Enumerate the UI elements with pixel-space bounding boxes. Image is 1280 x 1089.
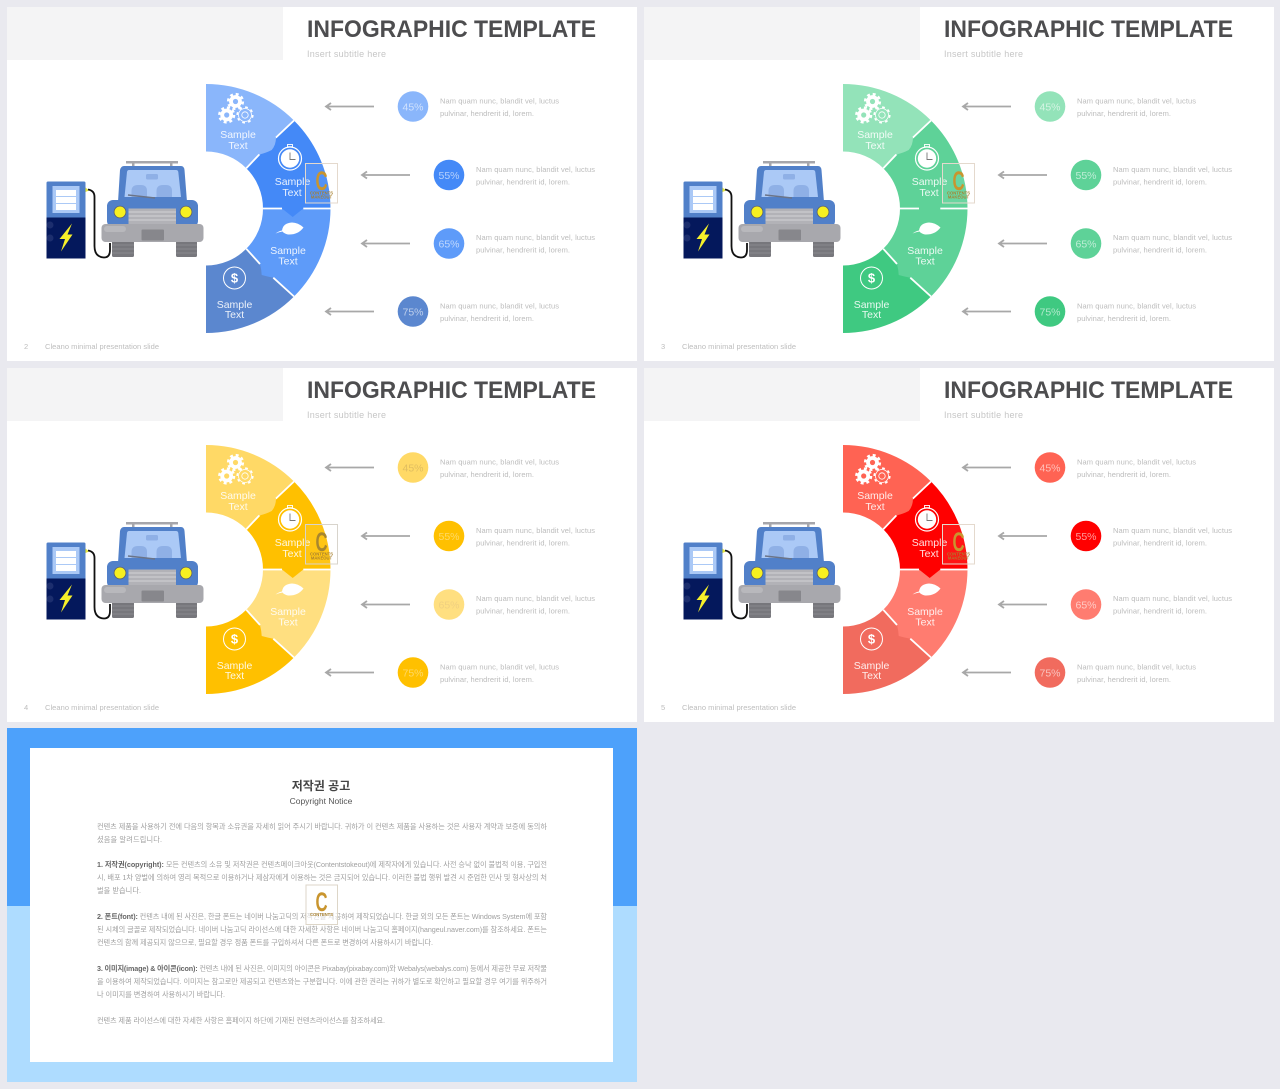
icon: gears — [856, 94, 890, 123]
item 55% — [1071, 160, 1232, 190]
item 45% — [398, 91, 559, 122]
illustration: fuel pump and car — [684, 522, 840, 620]
item 45%: 45% — [1039, 102, 1061, 114]
semicircle diagram: Sample — [220, 490, 256, 502]
subtitle: Insert subtitle here — [944, 410, 1023, 420]
item 55%: Nam quam nunc, blandit vel, luctus — [476, 165, 595, 174]
item 65%: pulvinar, hendrerit id, lorem. — [1113, 606, 1207, 616]
watermark logo: C — [315, 887, 328, 917]
semicircle diagram: Text — [862, 670, 881, 682]
semicircle diagram: Text — [228, 140, 248, 152]
item 55%: 55% — [1075, 531, 1097, 543]
semicircle diagram: Text — [282, 187, 302, 199]
item 75% — [398, 296, 559, 327]
semicircle diagram: Text — [278, 256, 298, 268]
item 55%: pulvinar, hendrerit id, lorem. — [1113, 178, 1207, 186]
watermark logo — [942, 524, 974, 564]
item 65%: 65% — [438, 238, 460, 250]
icon: leaf — [276, 584, 304, 596]
item 55% — [1071, 521, 1232, 551]
icon: gears — [220, 94, 253, 123]
item 55% — [434, 521, 595, 551]
icon: gears — [856, 455, 890, 484]
semicircle diagram: Sample — [907, 245, 943, 257]
footer: 4 — [24, 703, 28, 712]
clause 3: 3. 이미지(image) & 아이콘(icon): 컨텐츠 내에 된 사진은, 이미지의 아이콘은 Pixabay(pixabay.com)와 Webalys(webalys.com) 등에서 제공한 무료 저작물 — [97, 964, 547, 973]
semicircle diagram: Text — [278, 616, 298, 628]
subtitle: Insert subtitle here — [307, 410, 386, 420]
semicircle diagram: Sample — [217, 660, 252, 672]
item 75%: Nam quam nunc, blandit vel, luctus — [1077, 302, 1196, 310]
semicircle diagram: Text — [225, 309, 244, 321]
item 45%: Nam quam nunc, blandit vel, luctus — [1077, 96, 1196, 106]
item 45%: 45% — [1039, 462, 1061, 474]
semicircle diagram: Text — [919, 548, 939, 560]
watermark logo: C — [315, 527, 328, 557]
intro text — [97, 822, 547, 844]
footer: 2 — [24, 342, 28, 351]
item 65%: pulvinar, hendrerit id, lorem. — [476, 606, 570, 616]
copyright heading: 저작권 공고 — [292, 778, 350, 793]
item 65%: Nam quam nunc, blandit vel, luctus — [1113, 594, 1232, 603]
item 65% — [1071, 228, 1232, 259]
clause 1: 시, 배포 1차 양벌에 의하여 영리 목적으로 이용하거나 제삼자에게 이용하는 것은 금지되어 있습니다. 이러한 불법 행위 발견 시 준엄한 민사 및 형사상의 처 — [97, 873, 547, 882]
watermark logo — [942, 164, 974, 203]
item 55%: pulvinar, hendrerit id, lorem. — [476, 538, 570, 548]
item 75%: Nam quam nunc, blandit vel, luctus — [440, 302, 559, 310]
illustration: fuel pump and car — [46, 522, 204, 620]
semicircle diagram — [843, 445, 968, 694]
item 55%: Nam quam nunc, blandit vel, luctus — [1113, 526, 1232, 535]
subtitle: Insert subtitle here — [944, 49, 1023, 59]
semicircle diagram: Sample — [275, 176, 310, 188]
item 55%: 55% — [438, 531, 460, 543]
footer: Cleano minimal presentation slide — [682, 342, 796, 351]
semicircle diagram: Sample — [857, 490, 893, 502]
watermark logo: C — [315, 166, 328, 196]
item 45%: 45% — [402, 462, 424, 474]
clause 3: 을 이용하여 제작되었습니다. 이미지는 참고로만 제공되고 컨텐츠와는 구분합니다. 이에 관한 권리는 귀하가 별도로 확인하고 필요할 경우 여기를 위주하거 — [97, 977, 547, 986]
illustration: fuel pump and car — [684, 161, 840, 258]
watermark logo: MAKEOUT — [311, 194, 333, 200]
icon: dollar: $ — [868, 270, 876, 286]
item 65%: Nam quam nunc, blandit vel, luctus — [476, 233, 595, 242]
watermark logo: CONTENTS — [310, 190, 333, 196]
item 75%: 75% — [1039, 668, 1061, 680]
item 65%: Nam quam nunc, blandit vel, luctus — [476, 594, 595, 603]
title: INFOGRAPHIC TEMPLATE — [307, 16, 596, 43]
item 45%: Nam quam nunc, blandit vel, luctus — [440, 96, 559, 106]
icon: dollar: $ — [868, 632, 876, 646]
item 65%: Nam quam nunc, blandit vel, luctus — [1113, 233, 1232, 242]
clause 3: 나 이미지를 변경하여 사용하시기 바랍니다. — [97, 990, 225, 999]
item 75%: 75% — [402, 668, 424, 680]
item 65%: 65% — [1075, 600, 1097, 612]
semicircle diagram: Text — [865, 140, 885, 152]
icon: gears — [220, 455, 253, 484]
semicircle diagram: Sample — [907, 606, 943, 618]
semicircle diagram: Text — [915, 256, 935, 268]
icon: dollar: $ — [231, 270, 239, 286]
semicircle diagram: Text — [225, 670, 244, 682]
footer: Cleano minimal presentation slide — [682, 703, 796, 712]
clause 2: 2. 폰트(font): 컨텐츠 내에 된 사진은, 한글 폰트는 네이버 나눔고딕의 저작권을 제공하여 제작되었습니다. 한글 외의 모든 폰트는 Windows System에 포함 — [97, 912, 547, 921]
intro text: 셨음을 알려드립니다. — [97, 835, 162, 844]
item 45%: pulvinar, hendrerit id, lorem. — [440, 470, 534, 479]
item 75%: Nam quam nunc, blandit vel, luctus — [440, 662, 559, 672]
semicircle diagram: Sample — [912, 176, 947, 188]
watermark logo: C — [952, 166, 965, 196]
watermark logo: CONTENTS — [947, 190, 970, 196]
icon: leaf — [912, 222, 940, 235]
item 55%: pulvinar, hendrerit id, lorem. — [1113, 538, 1207, 548]
icon: stopwatch — [916, 506, 938, 531]
item 75%: 75% — [402, 306, 424, 318]
panel: green infographic slide — [644, 7, 1274, 361]
arrows — [963, 464, 1047, 676]
item 55%: Nam quam nunc, blandit vel, luctus — [476, 526, 595, 535]
semicircle diagram: Text — [862, 309, 881, 321]
item 65%: 65% — [438, 600, 460, 612]
arrows — [963, 103, 1047, 315]
footer: 5 — [661, 703, 665, 712]
semicircle diagram: Sample — [854, 660, 889, 672]
watermark logo: CONTENTS — [947, 552, 970, 556]
title: INFOGRAPHIC TEMPLATE — [944, 377, 1233, 404]
panel: blue infographic slide — [7, 7, 637, 361]
item 75%: 75% — [1039, 306, 1061, 318]
icon: leaf — [912, 584, 940, 596]
item 65%: 65% — [1075, 238, 1097, 250]
icon: dollar — [860, 628, 882, 650]
semicircle diagram: Text — [228, 501, 248, 513]
footer: Cleano minimal presentation slide — [45, 342, 159, 351]
subtitle: Insert subtitle here — [307, 49, 386, 59]
item 75%: pulvinar, hendrerit id, lorem. — [1077, 314, 1171, 323]
item 75%: pulvinar, hendrerit id, lorem. — [440, 675, 534, 684]
illustration: fuel pump and car — [46, 161, 204, 258]
semicircle diagram: Sample — [912, 537, 947, 549]
item 45% — [398, 452, 559, 483]
watermark logo: MAKEOUT — [311, 556, 333, 560]
panel: red infographic slide — [644, 368, 1274, 722]
footer: 3 — [661, 342, 665, 351]
icon: dollar: $ — [231, 632, 239, 646]
semicircle diagram: Sample — [270, 245, 306, 257]
semicircle diagram: Sample — [854, 299, 889, 311]
watermark logo: MAKEOUT — [948, 194, 970, 200]
title: INFOGRAPHIC TEMPLATE — [944, 16, 1233, 43]
watermark logo — [306, 885, 338, 924]
clause 1: 1. 저작권(copyright): 모든 컨텐츠의 소유 및 저작권은 컨텐츠메이크아웃(Contentstokeout)에 제작자에게 있습니다. 사전 승낙 없이 불법적 이용, 구입전 — [97, 860, 547, 869]
item 45%: Nam quam nunc, blandit vel, luctus — [1077, 458, 1196, 466]
watermark logo: CONTENTS — [310, 912, 333, 917]
semicircle diagram: Sample — [857, 129, 893, 141]
footer: Cleano minimal presentation slide — [45, 703, 159, 712]
item 75% — [1035, 296, 1196, 327]
icon: dollar — [860, 267, 882, 289]
intro text: 컨텐츠 제품을 사용하기 전에 다음의 항목과 소유권을 자세히 읽어 주시기 바랍니다. 귀하가 이 컨텐츠 제품을 사용하는 것은 사용자 계약과 보증에 동의하 — [97, 822, 547, 831]
item 55% — [434, 160, 595, 190]
item 45%: pulvinar, hendrerit id, lorem. — [1077, 470, 1171, 479]
copyright heading: Copyright Notice — [290, 796, 353, 806]
icon: stopwatch — [278, 506, 302, 531]
item 55%: pulvinar, hendrerit id, lorem. — [476, 178, 570, 186]
clause 1 — [97, 860, 547, 895]
item 65% — [1071, 589, 1232, 620]
icon: stopwatch — [916, 144, 938, 170]
item 55%: Nam quam nunc, blandit vel, luctus — [1113, 165, 1232, 174]
item 75%: pulvinar, hendrerit id, lorem. — [1077, 675, 1171, 684]
watermark logo: CONTENTS — [310, 552, 333, 556]
item 75%: pulvinar, hendrerit id, lorem. — [440, 314, 534, 323]
copyright heading — [290, 778, 353, 806]
clause 2: 된 시체의 글꼴로 제작되었습니다. 네이버 나눔고딕 라이선스에 대한 자세한 사항은 네이버 나눔고딕 홈페이지(hangeul.naver.com)를 참조하세요. 폰트는 — [97, 925, 547, 934]
watermark logo: MAKEOUT — [948, 556, 970, 560]
title: INFOGRAPHIC TEMPLATE — [307, 377, 596, 404]
item 65%: pulvinar, hendrerit id, lorem. — [476, 246, 570, 254]
arrows — [326, 103, 410, 315]
semicircle diagram: Text — [919, 187, 939, 199]
semicircle diagram — [206, 445, 330, 694]
item 45% — [1035, 452, 1196, 483]
arrows — [326, 464, 410, 676]
semicircle diagram: Sample — [270, 606, 306, 618]
clause 2: 컨텐츠의 함께 제공되지 않으므로, 필요할 경우 정품 폰트를 구입하셔서 다른 폰트로 변경하여 사용하시기 바랍니다. — [97, 938, 433, 947]
item 75% — [398, 657, 559, 688]
semicircle diagram: Text — [915, 616, 935, 628]
panel: copyright notice — [7, 728, 637, 1082]
semicircle diagram: Sample — [275, 537, 310, 549]
item 55%: 55% — [438, 170, 460, 182]
item 65% — [434, 228, 595, 259]
icon: dollar — [224, 267, 246, 289]
item 75%: Nam quam nunc, blandit vel, luctus — [1077, 662, 1196, 672]
semicircle diagram: Text — [865, 501, 885, 513]
item 45% — [1035, 91, 1196, 122]
item 75% — [1035, 657, 1196, 688]
semicircle diagram — [843, 84, 968, 333]
watermark logo: C — [952, 527, 965, 557]
item 45%: Nam quam nunc, blandit vel, luctus — [440, 458, 559, 466]
icon: leaf — [276, 222, 304, 235]
icon: stopwatch — [278, 144, 302, 170]
semicircle diagram: Text — [282, 548, 302, 560]
item 55%: 55% — [1075, 170, 1097, 182]
item 65%: pulvinar, hendrerit id, lorem. — [1113, 246, 1207, 254]
panel: yellow infographic slide — [7, 368, 637, 722]
icon: dollar — [224, 628, 246, 650]
closing text: 컨텐츠 제품 라이선스에 대한 자세한 사항은 홈페이지 하단에 기재된 컨텐츠라이선스를 참조하세요. — [97, 1016, 385, 1025]
semicircle diagram: Sample — [217, 299, 252, 311]
item 65% — [434, 589, 595, 620]
semicircle diagram: Sample — [220, 129, 256, 141]
clause 3 — [97, 964, 547, 999]
watermark logo — [306, 164, 338, 203]
item 45%: pulvinar, hendrerit id, lorem. — [1077, 109, 1171, 118]
clause 1: 벌을 받습니다. — [97, 886, 141, 895]
item 45%: 45% — [402, 102, 424, 114]
clause 2 — [97, 912, 547, 947]
item 45%: pulvinar, hendrerit id, lorem. — [440, 109, 534, 118]
semicircle diagram — [206, 84, 330, 333]
watermark logo — [306, 524, 338, 564]
